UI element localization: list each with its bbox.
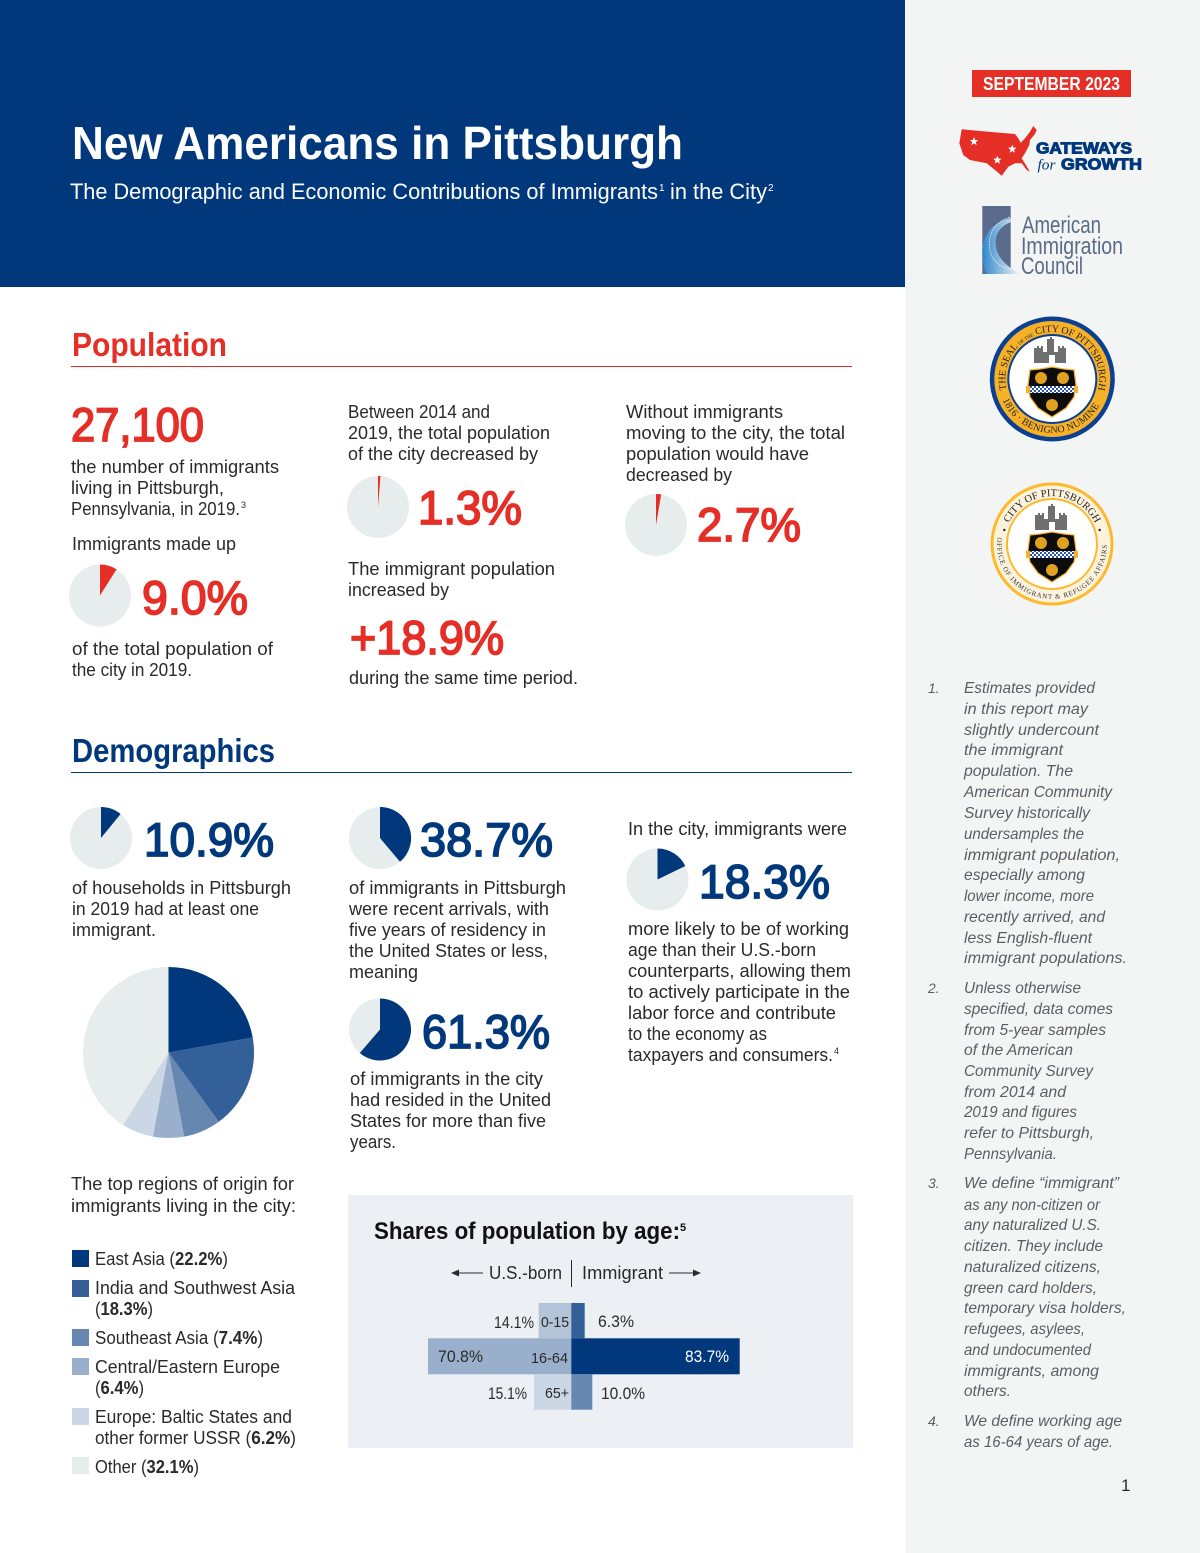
stat: 38.7% recent arrivals: of immigrants in Pittsburgh — [349, 878, 566, 898]
arrow: right — [669, 1270, 701, 1276]
stat: 61.3% long-term residents: 61.3% — [422, 1005, 550, 1058]
stat: 38.7% recent arrivals: five years of residency in — [349, 920, 546, 940]
stat: 9.0% of population — [69, 534, 274, 680]
footnote 4: 4. — [928, 1413, 940, 1429]
legend: regions of origin — [72, 1249, 296, 1477]
stat: 2.7% decrease without immigrants: Without immigrants — [626, 402, 783, 422]
text: top regions of origin: The top regions of origin for — [71, 1174, 294, 1194]
stat: 2.7% decrease without immigrants: moving to the city, the total — [626, 423, 845, 443]
legend: regions of origin: (6.4%) — [95, 1378, 144, 1398]
stat: 18.3% working age: to actively participate in the — [628, 982, 850, 1002]
stat: 18.3% working age: counterparts, allowing them — [628, 961, 851, 981]
footnote 2: 2019 and figures — [963, 1104, 1077, 1121]
sidebar background — [905, 0, 1200, 1553]
subtitle: 2 — [768, 183, 774, 194]
stat: 38.7% recent arrivals: the United States or less, — [349, 941, 548, 961]
pie: 61.3% — [349, 998, 411, 1060]
stat: 10.9% of households: 10.9% — [144, 813, 274, 866]
chart heading: Shares of population by age: — [374, 1218, 680, 1245]
footnote 2: from 5-year samples — [964, 1022, 1106, 1039]
stat: 18.3% working age: 4 — [834, 1046, 839, 1056]
footnote 3: 3. — [928, 1175, 940, 1191]
stat: 38.7% recent arrivals: 38.7% — [420, 813, 553, 866]
footnote 4: We define working age — [964, 1413, 1122, 1430]
footnote 1: immigrant populations. — [964, 950, 1127, 967]
footnote 4 — [928, 1413, 1122, 1451]
pie: 38.7% — [349, 807, 411, 869]
pie chart: regions of origin — [83, 967, 254, 1138]
footnote 1: in this report may — [964, 701, 1089, 718]
footnote 1: undersamples the — [964, 826, 1084, 843]
stat: 61.3% long-term residents: had resided in the United — [350, 1090, 551, 1110]
stat: 27,100 immigrants: the number of immigrants — [71, 457, 279, 477]
legend: regions of origin: Central/Eastern Europe — [95, 1357, 280, 1377]
logo: American Immigration Council: Immigration — [1021, 233, 1123, 260]
stat: 27,100 immigrants: 3 — [241, 500, 246, 510]
footnote 2: specified, data comes — [964, 1001, 1113, 1018]
subtitle: 1 — [659, 183, 665, 194]
stat: 18.3% working age: age than their U.S.-born — [628, 940, 816, 960]
logo: Gateways for Growth — [959, 126, 1142, 176]
stat: 61.3% long-term residents: of immigrants in the city — [350, 1069, 543, 1089]
axis labels with arrows: U.S.-born — [489, 1263, 562, 1283]
footnote 1: American Community — [963, 784, 1113, 801]
stat: 1.3% decrease: 2019, the total population — [348, 423, 550, 443]
stat: +18.9% increase: increased by — [348, 580, 449, 600]
seal: City of Pittsburgh — [990, 316, 1115, 442]
seal: Office of Immigrant and Refugee Affairs: CITY OF PITTSBURGH — [1004, 489, 1102, 523]
pie: 9.0% — [69, 564, 131, 626]
stat: 18.3% working age — [626, 819, 851, 1065]
footnote 1: lower income, more — [964, 888, 1094, 905]
stat: 1.3% decrease: Between 2014 and — [348, 402, 490, 422]
stat: 38.7% recent arrivals — [348, 807, 566, 982]
stat: 27,100 immigrants: living in Pittsburgh, — [71, 478, 224, 498]
stat: 9.0% of population: of the total population of — [72, 639, 274, 659]
heading: demographics: Demographics — [72, 732, 275, 769]
stat: 10.9% of households: in 2019 had at least one — [72, 899, 259, 919]
footnote 1 — [928, 680, 1127, 967]
seal: Office of Immigrant and Refugee Affairs — [990, 482, 1114, 606]
butterfly bar chart: 6.3% — [598, 1312, 634, 1331]
footnote 4: as 16-64 years of age. — [964, 1434, 1113, 1451]
axis labels with arrows: Immigrant — [582, 1263, 663, 1283]
butterfly bar chart: 70.8% — [438, 1347, 483, 1366]
crest — [1026, 337, 1078, 417]
legend: regions of origin: Other (32.1%) — [95, 1457, 199, 1477]
stat: 38.7% recent arrivals: were recent arrivals, with — [348, 899, 549, 919]
legend: regions of origin: East Asia (22.2%) — [95, 1249, 228, 1269]
footnote 3: naturalized citizens, — [964, 1259, 1101, 1276]
stat: 27,100 immigrants: 27,100 — [71, 398, 204, 451]
stat: 61.3% long-term residents: States for more than five — [350, 1111, 546, 1131]
pie: 1.3% — [347, 476, 409, 538]
logo: Gateways for Growth: for — [1038, 158, 1056, 174]
footnote 3 — [928, 1175, 1126, 1400]
butterfly bar chart: 10.0% — [601, 1384, 645, 1403]
butterfly bar chart: 83.7% — [685, 1347, 729, 1366]
footnote 1: especially among — [964, 867, 1085, 884]
stat: 61.3% long-term residents — [349, 998, 551, 1152]
page number: 1 — [1121, 1476, 1130, 1495]
footnote 1: less English-fluent — [964, 930, 1093, 947]
stat: 18.3% working age: labor force and contribute — [628, 1003, 836, 1023]
butterfly bar chart: 14.1% — [494, 1313, 534, 1332]
crest — [1026, 504, 1078, 582]
stat: 2.7% decrease without immigrants: population would have — [626, 444, 809, 464]
footnote 3: and undocumented — [964, 1342, 1092, 1359]
stat: 1.3% decrease — [347, 402, 550, 538]
footnote 3: any naturalized U.S. — [964, 1217, 1101, 1234]
logo: American Immigration Council: American — [1022, 212, 1101, 239]
footnote 1: the immigrant — [964, 742, 1064, 759]
pie: 2.7% — [625, 494, 687, 556]
footnote 3: green card holders, — [964, 1280, 1097, 1297]
stat: 18.3% working age: taxpayers and consumers. — [628, 1045, 833, 1065]
stat: 27,100 immigrants — [71, 398, 279, 519]
stat: 18.3% working age: 18.3% — [699, 855, 830, 908]
footnote 1: Estimates provided — [964, 680, 1096, 697]
arrow: left — [451, 1270, 483, 1276]
chart heading: 5 — [680, 1222, 686, 1234]
logo: American Immigration Council: Council — [1021, 253, 1083, 280]
butterfly bar chart: 15.1% — [488, 1384, 527, 1403]
stat: 9.0% of population: the city in 2019. — [72, 660, 192, 680]
logo: Gateways for Growth: GROWTH — [1061, 156, 1142, 174]
footnote 3: others. — [964, 1383, 1011, 1400]
logo: American Immigration Council — [982, 206, 1123, 280]
butterfly bar chart: 0-15 — [541, 1314, 569, 1331]
seal: Office of Immigrant and Refugee Affairs: OFFICE OF IMMIGRANT & REFUGEE AFFAIRS — [997, 538, 1107, 599]
text: top regions of origin — [71, 1174, 296, 1216]
footnote 1: population. The — [963, 763, 1073, 780]
title: New Americans in Pittsburgh — [72, 117, 683, 169]
stat: +18.9% increase: +18.9% — [350, 611, 504, 664]
pie: 18.3% — [626, 848, 688, 910]
butterfly bar chart: 65+ — [545, 1385, 569, 1402]
stat: 2.7% decrease without immigrants: decreased by — [626, 465, 732, 485]
seal: City of Pittsburgh: 1816 · BENIGNO NUMINE — [1002, 398, 1099, 433]
footnote 2 — [927, 980, 1113, 1163]
stat: 10.9% of households: immigrant. — [72, 920, 156, 940]
stat: +18.9% increase: The immigrant population — [348, 559, 555, 579]
footnote 1: Survey historically — [964, 805, 1091, 822]
butterfly bar chart: 16-64 — [531, 1350, 568, 1367]
legend: regions of origin: Europe: Baltic States and — [95, 1407, 292, 1427]
legend: regions of origin: India and Southwest Asia — [95, 1278, 296, 1298]
stat: 1.3% decrease: of the city decreased by — [348, 444, 538, 464]
footnote 3: immigrants, among — [964, 1363, 1099, 1380]
footnote 2: Pennsylvania. — [964, 1146, 1057, 1163]
stat: 61.3% long-term residents: years. — [350, 1132, 396, 1152]
panel: shares of population by age — [348, 1195, 853, 1448]
axis labels with arrows — [451, 1260, 701, 1287]
stat: 2.7% decrease without immigrants — [625, 402, 845, 556]
subtitle: in the City — [670, 179, 767, 204]
stat: 18.3% working age: to the economy as — [628, 1024, 767, 1044]
stat: 18.3% working age: more likely to be of working — [628, 919, 849, 939]
footnote 3: refugees, asylees, — [964, 1321, 1085, 1338]
pie: 10.9% — [70, 807, 132, 869]
stat: 2.7% decrease without immigrants: 2.7% — [697, 498, 801, 551]
logo: Gateways for Growth: GATEWAYS — [1036, 140, 1132, 158]
footnote 2: 2. — [927, 980, 940, 996]
stat: +18.9% increase: during the same time period. — [349, 668, 578, 688]
text: top regions of origin: immigrants living in the city: — [71, 1196, 296, 1216]
footnote 2: of the American — [964, 1042, 1073, 1059]
butterfly bar chart — [428, 1303, 740, 1410]
stat: 9.0% of population: Immigrants made up — [72, 534, 236, 554]
date badge — [972, 70, 1131, 97]
footnote 2: from 2014 and — [964, 1084, 1067, 1101]
footnote 1: immigrant population, — [964, 847, 1120, 864]
section: demographics — [70, 732, 853, 1477]
stat: 38.7% recent arrivals: meaning — [349, 962, 418, 982]
footnote 2: refer to Pittsburgh, — [964, 1125, 1094, 1142]
footnote 3: citizen. They include — [964, 1238, 1103, 1255]
footnotes — [927, 680, 1127, 1451]
footnote 2: Community Survey — [964, 1063, 1094, 1080]
footnote 3: temporary visa holders, — [964, 1300, 1126, 1317]
footnote 3: as any non-citizen or — [964, 1197, 1101, 1214]
footnote 1: 1. — [928, 680, 940, 696]
legend: regions of origin: (18.3%) — [95, 1299, 153, 1319]
subtitle: The Demographic and Economic Contributions of Immigrants — [70, 179, 658, 204]
footnote 1: slightly undercount — [964, 722, 1100, 739]
stat: 10.9% of households — [70, 807, 291, 940]
stat: +18.9% increase — [348, 559, 578, 688]
footnote 3: We define “immigrant” — [964, 1175, 1120, 1192]
stat: 18.3% working age: In the city, immigrants were — [628, 819, 847, 839]
footnote 1: recently arrived, and — [964, 909, 1106, 926]
header banner — [0, 0, 905, 287]
stat: 10.9% of households: of households in Pittsburgh — [72, 878, 291, 898]
legend: regions of origin: other former USSR (6.2%) — [95, 1428, 296, 1448]
footnote 2: Unless otherwise — [964, 980, 1081, 997]
date badge: SEPTEMBER 2023 — [983, 74, 1120, 94]
stat: 1.3% decrease: 1.3% — [418, 481, 522, 534]
section: population — [69, 326, 852, 688]
seal: City of Pittsburgh: THE SEAL OF THE CITY OF PITTSBURGH — [998, 325, 1106, 391]
stat: 27,100 immigrants: Pennsylvania, in 2019. — [71, 499, 240, 519]
legend: regions of origin: Southeast Asia (7.4%) — [95, 1328, 263, 1348]
heading: population: Population — [72, 326, 227, 363]
stat: 9.0% of population: 9.0% — [142, 571, 248, 624]
